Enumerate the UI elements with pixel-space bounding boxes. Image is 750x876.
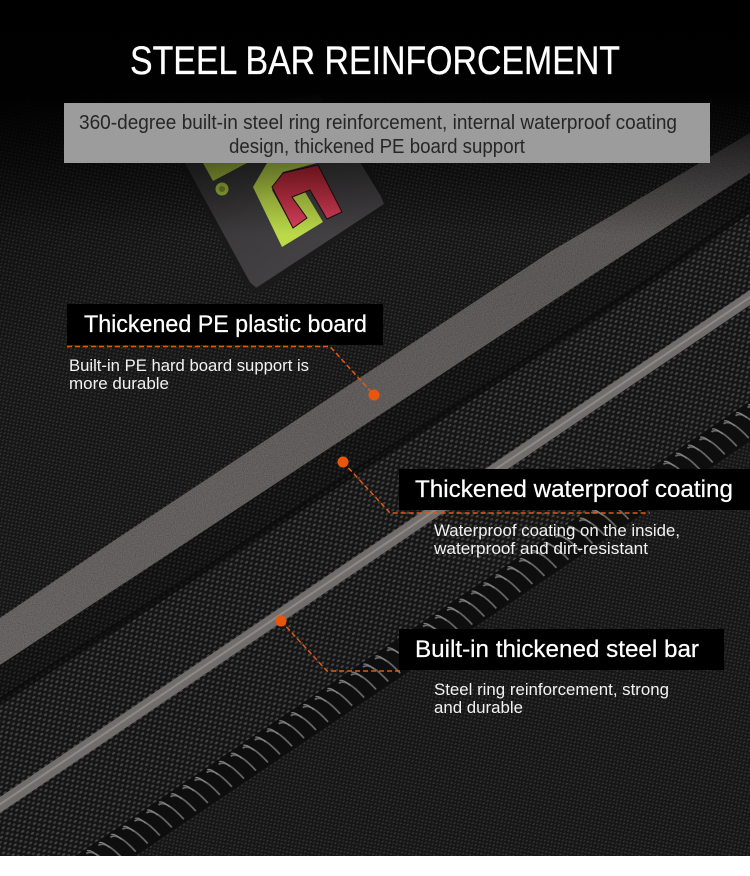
steel bar highlight [0, 296, 750, 806]
heading: waterproof coating: Thickened waterproof coating [415, 476, 733, 503]
groove shadow [0, 205, 750, 705]
leader line: steel bar [281, 621, 400, 671]
description: steel bar [434, 680, 669, 717]
icon: rubber logo patch [170, 92, 387, 291]
heading: PE plastic board [67, 304, 383, 345]
leader line: PE plastic board [67, 346, 374, 395]
description: waterproof coating: waterproof and dirt-resistant [433, 539, 648, 558]
lower strap [0, 305, 750, 856]
title: STEEL BAR REINFORCEMENT [130, 39, 620, 83]
description: waterproof coating: Waterproof coating on the inside, [434, 521, 680, 540]
description: steel bar: Steel ring reinforcement, strong [434, 680, 669, 699]
gray PE board band [0, 133, 750, 665]
description: PE plastic board: more durable [69, 374, 169, 393]
leader line: waterproof coating [343, 462, 650, 513]
caption text [79, 112, 677, 158]
heading: steel bar: Built-in thickened steel bar [415, 636, 699, 663]
heading: waterproof coating [399, 469, 750, 510]
description: PE plastic board: Built-in PE hard board support is [69, 356, 309, 375]
caption text: 360-degree built-in steel ring reinforcement, internal waterproof coating [79, 112, 677, 134]
description: PE plastic board [69, 356, 309, 393]
description: steel bar: and durable [434, 698, 523, 717]
steel bar [0, 290, 750, 813]
callout: waterproof coating [338, 456, 750, 558]
white bottom strip [0, 856, 750, 876]
dark strip below the PE board [0, 173, 750, 700]
callout: steel bar [276, 616, 724, 717]
raised waterproof coating strap [0, 208, 750, 797]
corner dark vignette [0, 0, 750, 500]
caption text: design, thickened PE board support [229, 136, 525, 158]
marker dot: PE plastic board [368, 390, 380, 400]
heading: PE plastic board: Thickened PE plastic board [84, 311, 367, 338]
intro caption box [64, 103, 710, 163]
top dark vignette [0, 0, 750, 235]
zipper teeth [76, 401, 750, 856]
marker dot: waterproof coating [338, 456, 348, 468]
marker dot: steel bar [276, 616, 286, 626]
description: waterproof coating [433, 521, 680, 558]
callout: PE plastic board [67, 304, 383, 400]
heading: steel bar [399, 629, 724, 670]
